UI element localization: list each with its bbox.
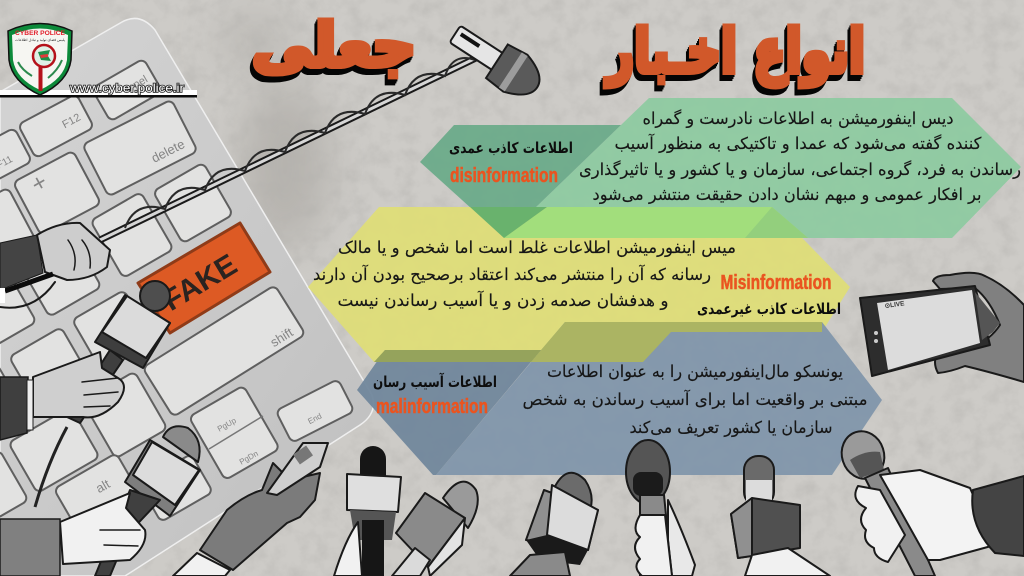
title: جعلی: جعلی [252, 11, 416, 81]
logo strip and website url: www.cyber.police.ir [69, 81, 184, 95]
hand holding voice recorder [173, 443, 328, 576]
microphone with white hand, bottom left [0, 426, 200, 576]
keyboard: pel [131, 74, 150, 91]
keyboard: shift [268, 324, 296, 350]
green label hexagon [420, 125, 621, 238]
text block: misinformation description: میس اینفورمیشن اطلاعات غلط است اما شخص و یا مالک [338, 238, 736, 258]
text block: disinformation description: بر افکار عمومی و مبهم نشان دادن حقیقت منتشر می‌شود [592, 185, 982, 205]
keyboard: PgUp [216, 416, 238, 434]
keyboard: + [27, 168, 52, 199]
keyboard: F12 [60, 112, 83, 131]
label: disinformation: اطلاعات کاذب عمدی [449, 139, 573, 157]
label: misinformation: اطلاعات کاذب غیرعمدی [697, 300, 841, 318]
logo: cyber police shield: پلیس فضای تولید و تبادل اطلاعات [15, 38, 65, 42]
label: disinformation: disinformation [450, 165, 558, 187]
logo strip and website url [0, 81, 197, 98]
green main hexagon [504, 98, 1021, 238]
FAKE key [138, 223, 270, 333]
microphone: light box with dark base [510, 473, 598, 576]
keyboard: delete [149, 136, 187, 166]
logo: cyber police shield: CYBER POLICE [15, 30, 66, 37]
keyboard: End [306, 412, 323, 426]
microphone: black head with white box [334, 446, 401, 576]
label: malinformation [373, 373, 497, 418]
label: disinformation [449, 139, 573, 187]
text block: malinformation description: مبتنی بر واقعیت اما برای آسیب رساندن به شخص [522, 390, 868, 410]
icon: hand holding phone [860, 273, 1024, 382]
microphone: white hand at right [836, 426, 1024, 576]
title: انواع اخبار: انواع اخـبار [605, 17, 865, 87]
icon: hand holding phone: ⊙LIVE [884, 300, 906, 310]
text block: disinformation description [579, 109, 1021, 205]
label: misinformation: Misinformation [720, 272, 832, 294]
FAKE key: FAKE [157, 248, 243, 318]
keyboard: alt [93, 476, 113, 496]
text block: malinformation description [522, 362, 868, 438]
text block: misinformation description: و هدفشان صدمه زدن و یا آسیب رساندن نیست [338, 291, 668, 311]
panel: yellow misinformation [308, 207, 850, 362]
label: malinformation: اطلاعات آسیب رسان [373, 373, 497, 391]
text block: disinformation description: دیس اینفورمیشن به اطلاعات نادرست و گمراه [642, 109, 954, 129]
label: malinformation: malinformation [376, 396, 488, 418]
text block: misinformation description: رسانه که آن را منتشر می‌کند اعتقاد برصحیح بودن آن دارند [313, 265, 711, 285]
text block: misinformation description [313, 238, 736, 311]
microphone on boom with hand [0, 16, 549, 308]
text block: malinformation description: یونسکو مال‌اینفورمیشن را به عنوان اطلاعات [547, 362, 843, 382]
keyboard: PgDn [238, 449, 260, 467]
microphone: tall oval head with hand [626, 440, 695, 576]
text block: disinformation description: کننده گفته می‌شود که عمدا و تاکتیکی به منظور آسیب [614, 134, 982, 154]
label: misinformation [697, 272, 841, 318]
text block: disinformation description: رساندن به فرد، گروه اجتماعی، سازمان و یا کشور و یا تاثیرگذاری [579, 160, 1021, 180]
microphone with hand, middle left [0, 281, 170, 507]
panel: green disinformation [420, 98, 1021, 238]
microphone: gray box angled [392, 482, 478, 576]
panel: blue malinformation [357, 322, 882, 475]
keyboard [0, 18, 374, 576]
logo: cyber police shield [8, 24, 72, 95]
microphone: cube box with white hand [731, 456, 830, 576]
text block: malinformation description: سازمان یا کشور تعریف می‌کند [630, 418, 832, 438]
